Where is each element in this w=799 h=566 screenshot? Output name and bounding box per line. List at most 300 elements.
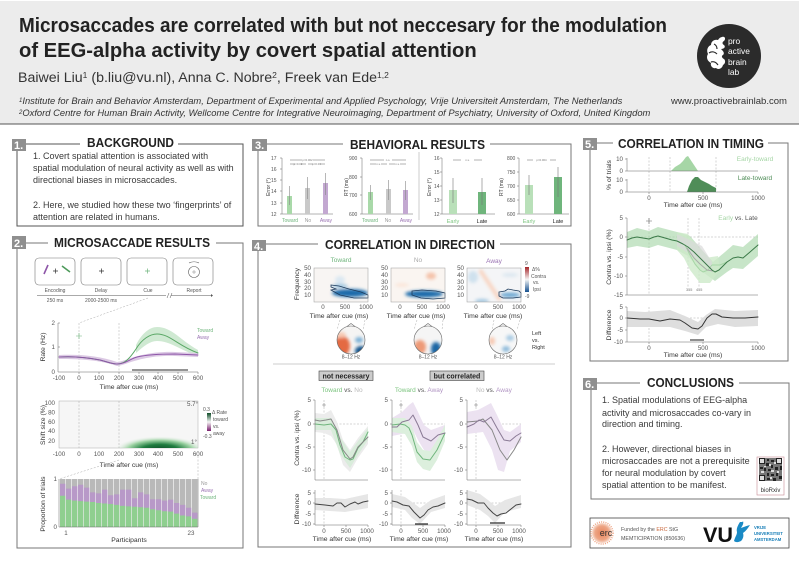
heatmap: no: 40 [381,272,389,279]
bar chart: RT by timing: Late [553,219,563,225]
bar chart: error by direction [266,156,333,224]
difference chart: no vs away: 5 [460,490,464,497]
panel: behavioral results [252,137,571,226]
task diagram: Cue [143,288,153,294]
line chart: early vs late: -5 [617,254,624,261]
text block [33,151,234,222]
bar chart: RT by timing: p=0.004 [536,158,547,162]
difference chart: timing: 0 [647,345,651,352]
bar chart: error by direction: p=0.03 [312,162,321,166]
heatmap: away: 10 [457,292,465,299]
line chart: early vs late: -10 [614,273,624,280]
left vs right label: Left [532,331,542,337]
icon: VU logo [703,521,783,547]
line chart: saccade rate: 400 [153,375,164,382]
heatmap: away: 30 [457,279,465,286]
difference chart: toward vs no: Difference [294,493,301,524]
icon: proactive brain lab logo [697,24,761,88]
heatmap: toward: Frequency [294,267,301,300]
chart: toward vs no: 0 [308,421,312,428]
line chart: saccade rate: 0 [77,375,81,382]
bar chart: error by direction: Away [320,218,333,224]
chart: toward vs away: -10 [379,467,389,474]
line chart: early vs late: 355 [686,288,692,292]
label: but correlated [430,371,484,380]
text block: 1. Spatial modulations of EEG-alpha [602,395,747,405]
bar chart: RT by direction: n.s. [395,162,400,166]
heatmap: toward: 20 [304,285,312,292]
heatmap: no: 1000 [436,304,450,311]
stacked bar chart: proportion of trials: No [201,481,208,487]
bar chart: RT by direction [344,156,413,224]
authors: 2 [272,70,277,80]
panel number [583,138,597,151]
difference chart: toward vs no: 0 [308,500,312,507]
heatmap: toward: 0 [321,304,325,311]
difference chart: no vs away: 1000 [512,528,526,535]
difference chart: no vs away [454,490,526,543]
colorbar legend: -9 [525,294,530,300]
icon: VU logo: VRIJE [754,525,766,530]
bar chart: error by timing: Early [447,219,460,225]
panel number [252,139,267,152]
panel number: 2. [14,238,23,250]
bar chart: error by direction: 14 [271,189,277,195]
line chart: early vs late: Contra vs. ipsi (%) [606,229,613,285]
difference chart: toward vs away: 0 [385,500,389,507]
affiliations: Institute for Brain and Behavior Amsterdam, Department of Experimental and Applied Psychology, Vrije Universiteit Amsterdam, The Netherlands [22,95,623,106]
colorbar legend: away [213,431,225,437]
heatmap: shift size: 5.7° [187,401,199,408]
icon: QR code: bioRxiv [761,488,780,494]
line chart: saccade rate: 300 [134,375,145,382]
bar chart: error by timing: 16 [434,156,440,162]
task diagram: Encoding [45,288,66,294]
difference chart: toward vs away: 1000 [437,528,451,535]
colorbar legend: Δ% [532,267,540,273]
topography: no: 8–12 Hz [419,354,438,360]
difference chart: toward vs no: 0 [322,528,326,535]
heatmap: toward [294,257,373,320]
affiliations [18,95,651,118]
difference chart: toward vs away [379,490,451,543]
text block: spatial modulation of neural activity as well as with [33,163,234,173]
left vs right label [532,331,545,351]
icon: ERC logo [591,522,613,544]
bar chart: error by direction: 17 [271,156,277,162]
histogram: timing distribution: 10 [616,156,624,163]
bar chart: RT by direction: 600 [349,212,358,218]
line chart: early vs late: -15 [614,292,624,299]
bar chart: RT by timing: 750 [507,170,516,176]
panel: background [12,135,243,226]
line chart: saccade rate [40,298,213,391]
panel number [583,378,597,391]
colorbar legend: toward [213,417,228,423]
heatmap: away: 1000 [512,304,526,311]
difference chart: toward vs no: 5 [308,490,312,497]
bar chart: error by timing [427,156,495,225]
line chart: saccade rate: 1 [52,344,56,351]
difference chart: toward vs no: -10 [302,521,312,528]
bar chart: error by direction: p=0.02 [294,162,303,166]
header band [0,1,799,124]
difference chart: timing: 0 [620,315,624,322]
text block: 2. However, directional biases in [602,444,731,454]
histogram: timing distribution: Late-toward [738,175,773,182]
heatmap: shift size: -100 [53,451,66,458]
line chart: saccade rate: 0 [52,369,56,376]
heatmap: away: 40 [457,272,465,279]
task diagram: Delay [95,288,108,294]
icon: ERC logo: erc [600,528,613,538]
authors: 1 [83,70,88,80]
icon: proactive brain lab logo: brain [728,57,747,67]
heatmap: away [457,258,526,320]
heatmap: toward: 50 [304,265,312,272]
difference chart: timing [606,304,765,359]
difference chart: toward vs away: 5 [385,490,389,497]
panel: microsaccade results [12,235,243,548]
heatmap: away: Time after cue (ms) [464,313,522,320]
histogram: timing distribution: Time after cue (ms) [664,202,722,209]
task diagram: Report [186,288,202,294]
bar chart: error by timing: n.s. [465,158,470,162]
line chart: saccade rate: Away [197,335,210,341]
text block: 2. Here, we studied how these two ‘fingerprints’ of [33,200,232,210]
panel: conclusions [583,375,789,499]
line chart: saccade rate: 200 [114,375,125,382]
bar chart: error by direction: 12 [271,212,277,218]
difference chart: timing: -10 [614,339,624,346]
chart: no vs away: -5 [457,444,464,451]
difference chart: timing: -5 [617,327,624,334]
difference chart: no vs away: -5 [457,511,464,518]
topography: away [489,324,517,360]
left vs right label: vs. [532,338,540,344]
heatmap: shift size: 300 [134,451,145,458]
difference chart: toward vs no: Time after cue (ms) [313,536,371,543]
panel number: 1. [14,140,23,152]
topography: away: 8–12 Hz [494,354,513,360]
title: Microsaccades are correlated with but not neccesary for the modulation [19,15,667,37]
bar chart: error by direction: 13 [271,201,277,207]
affiliations: 2 [18,110,23,116]
line chart: saccade rate: 600 [193,375,204,382]
topography: toward: 8–12 Hz [342,354,361,360]
text block: 1. Covert spatial attention is associated with [33,151,208,161]
stacked bar chart: proportion of trials: Toward [200,495,216,501]
heatmap: away: 50 [457,265,465,272]
topography: toward [336,323,366,358]
difference chart: timing: 1000 [751,345,765,352]
line chart: early vs late: 0 [620,234,624,241]
chart: toward vs away: 0 [385,421,389,428]
website: www.proactivebrainlab.com [670,96,787,106]
panel number: 3. [255,140,264,152]
text block: spatial attention to be manifest. [602,480,727,490]
heatmap: toward: 10 [304,292,312,299]
bar chart: error by direction: Error (°) [266,178,272,196]
heatmap: shift size: 500 [173,451,184,458]
heatmap: no [381,257,450,320]
histogram: timing distribution: 1000 [751,195,765,202]
stacked bar chart: proportion of trials: 0 [54,524,58,531]
chart: no vs away: -10 [454,467,464,474]
heatmap: no: 500 [417,304,428,311]
left vs right label: Right [532,345,545,351]
text block: microsaccades are not a prerequisite [602,456,750,466]
chart: toward vs no: Contra vs. ipsi (%) [294,410,301,466]
difference chart: toward vs away: Time after cue (ms) [390,536,448,543]
stacked bar chart: proportion of trials: 23 [188,530,195,537]
heatmap: no: No [414,257,423,264]
line chart: saccade rate: -100 [53,375,66,382]
heading: MICROSACCADE RESULTS [54,235,210,250]
heatmap: shift size: 400 [153,451,164,458]
text block: attention are related in humans. [33,212,160,222]
bar chart: RT by timing: 650 [507,198,516,204]
heatmap: shift size [40,400,228,469]
colorbar legend: vs. [533,280,539,286]
difference chart: toward vs away: -5 [382,511,389,518]
line chart: saccade rate: Rate (Hz) [40,332,47,362]
panel: correlation in direction [252,237,571,547]
histogram: timing distribution: 0 [620,168,624,175]
title: of EEG-alpha activity by covert spatial attention [19,40,477,62]
difference chart: toward vs away: 0 [399,528,403,535]
stacked bar chart: proportion of trials: Away [201,488,214,494]
heading: CORRELATION IN DIRECTION [325,237,495,252]
difference chart: no vs away: 0 [460,500,464,507]
heading: CORRELATION IN TIMING [618,136,764,151]
stacked bar chart: proportion of trials: 1 [64,530,68,537]
funding text [621,527,685,542]
heatmap: away: 0 [474,304,478,311]
task diagram: 250 ms [47,298,64,304]
heatmap: toward: 500 [340,304,351,311]
funding logos [590,518,789,548]
histogram: timing distribution: % of trials [606,159,613,190]
heatmap: away: 500 [493,304,504,311]
heatmap: away: 20 [457,285,465,292]
bar chart: error by direction: p=0.002 [302,158,313,162]
histogram: timing distribution: 0 [620,189,624,196]
title [19,15,667,62]
difference chart: toward vs no [294,490,374,543]
difference chart: timing: 5 [620,304,624,311]
bar chart: error by direction: No [305,218,311,224]
difference chart: toward vs no: 500 [341,528,352,535]
heatmap: no: Time after cue (ms) [387,313,445,320]
heatmap: toward: 30 [304,279,312,286]
colorbar legend [203,407,228,440]
funding text: MEMTICIPATION (850636) [621,536,685,542]
stacked bar chart: proportion of trials: 1 [54,476,58,483]
bar chart: RT by direction: Toward [362,218,378,224]
line chart: early vs late: 5 [620,215,624,222]
heatmap: toward: Time after cue (ms) [310,313,368,320]
text block: directional biases in microsaccades. [33,175,177,185]
topography: no [414,324,442,360]
difference chart: toward vs no: 1000 [360,528,374,535]
heatmap: shift size: 1° [191,439,197,446]
difference chart: timing: 500 [698,345,709,352]
difference chart: toward vs away: 500 [418,528,429,535]
bar chart: RT by direction: No [385,218,391,224]
heatmap: shift size: 100 [94,451,105,458]
heading: CONCLUSIONS [647,375,734,390]
chart: toward vs no [294,387,368,480]
label: not necessary [319,371,373,380]
histogram: timing distribution [606,156,774,209]
bar chart: RT by direction: 900 [349,156,358,162]
heatmap: no: 10 [381,292,389,299]
bar chart: RT by direction: Away [400,218,413,224]
line chart: saccade rate: 500 [173,375,184,382]
heatmap: no: 0 [398,304,402,311]
histogram: timing distribution: 0 [647,195,651,202]
task diagram: 2000-2500 ms [85,298,117,304]
stacked bar chart: proportion of trials: Participants [111,537,147,544]
bar chart: error by timing: 15 [434,170,440,176]
chart: toward vs no: 5 [308,397,312,404]
colorbar legend: Ipsi [533,287,541,293]
line chart: early vs late: 455 [696,288,702,292]
colorbar legend: Δ Rate [212,410,227,416]
authors: , Freek van Ede [277,70,377,86]
line chart: saccade rate: Toward [197,328,213,334]
panel number [252,240,266,253]
icon: proactive brain lab logo: pro [728,36,740,46]
chart: no vs away: 5 [460,397,464,404]
bar chart: RT by timing: RT (ms) [499,178,505,196]
bar chart: RT by direction: 700 [349,193,358,199]
chart: toward vs away: Toward vs. Away [395,387,444,394]
bar chart: RT by timing [499,156,569,225]
bar chart: error by timing: Error (°) [427,178,433,196]
line chart: early vs late [606,215,758,299]
heatmap: shift size: 20 [48,438,56,445]
difference chart: no vs away: -10 [454,521,464,528]
text block [602,395,751,490]
heatmap: shift size: 40 [48,428,56,435]
bar chart: error by timing: Late [477,219,487,225]
chart: no vs away: 0 [460,421,464,428]
affiliations: 1 [19,98,22,104]
bar chart: RT by timing: 600 [507,212,516,218]
chart: toward vs away: 5 [385,397,389,404]
heatmap: shift size: 60 [48,419,56,426]
chart: toward vs no: -5 [305,444,312,451]
panel number: 5. [585,139,594,151]
bar chart: error by direction: 15 [271,178,277,184]
difference chart: timing: Time after cue (ms) [664,352,722,359]
bar chart: error by direction: 16 [271,167,277,173]
icon: VU logo: VU [703,524,733,547]
bar chart: RT by timing: 800 [507,156,516,162]
histogram: timing distribution: 500 [698,195,709,202]
heatmap: toward: 1000 [359,304,373,311]
line chart: early vs late: Early vs. Late [718,215,758,222]
heatmap: shift size: 100 [45,400,56,407]
histogram: timing distribution: Early-toward [737,156,774,163]
stacked bar chart: proportion of trials [40,456,216,544]
line chart: saccade rate: 2 [52,320,56,327]
heading: BEHAVIORAL RESULTS [350,137,485,152]
funding text: Funded by the ERC StG [621,527,678,533]
heading: BACKGROUND [87,135,174,150]
heatmap: no: 50 [381,265,389,272]
colorbar legend: 9 [525,261,528,267]
bar chart: error by timing: 14 [434,184,440,190]
chart: toward vs away [379,387,445,480]
panel number [12,139,26,152]
icon: proactive brain lab logo: lab [728,67,740,77]
histogram: timing distribution: 10 [616,177,624,184]
difference chart: no vs away: 0 [474,528,478,535]
colorbar legend: 0.3 [203,407,210,413]
heatmap: shift size: 0 [77,451,81,458]
chart: toward vs no: -10 [302,467,312,474]
bar chart: error by timing: 13 [434,198,440,204]
text block: direction and timing. [602,419,683,429]
colorbar legend: -0.3 [203,434,212,440]
difference chart: toward vs away: -10 [379,521,389,528]
label: not necessary: not necessary [322,374,370,380]
panel number [12,236,26,250]
heatmap: shift size: Time after cue (ms) [100,462,158,469]
bar chart: RT by direction: n.s. [386,158,390,162]
panel number: 4. [254,241,263,253]
line chart: saccade rate: 100 [94,375,105,382]
chart: no vs away: No vs. Away [476,387,513,394]
heatmap: no: 30 [381,279,389,286]
difference chart: toward vs no: -5 [305,511,312,518]
bar chart: RT by timing: 700 [507,184,516,190]
colorbar legend: Contra [531,274,546,280]
task diagram [35,258,213,304]
authors: Baiwei Liu [18,70,83,86]
heatmap: away: Away [486,258,503,265]
bar chart: error by timing: 12 [434,212,440,218]
text block: activity and microsaccades co-vary in [602,408,751,418]
affiliations: Oxford Centre for Human Brain Activity, Wellcome Centre for Integrative Neuroimaging, Department of Psychiatry, University of Oxford, United Kingdom [22,107,651,118]
heatmap: shift size: Shift size (%) [40,405,47,445]
heatmap: toward: 40 [304,272,312,279]
difference chart: no vs away: 500 [493,528,504,535]
panel number: 6. [585,379,594,391]
stacked bar chart: proportion of trials: Proportion of trials [40,476,47,532]
bar chart: RT by direction: RT (ms) [344,178,350,196]
icon: VU logo: UNIVERSITEIT [754,531,783,536]
bar chart: error by direction: Toward [282,218,298,224]
colorbar legend [525,261,546,300]
authors: 1,2 [377,70,389,80]
heatmap: toward: Toward [331,257,352,264]
bar chart: RT by direction: n.s. [376,162,381,166]
bar chart: RT by timing: Early [523,219,536,225]
line chart: saccade rate: Time after cue (ms) [100,384,158,391]
icon: proactive brain lab logo: active [728,46,750,56]
heatmap: shift size: 80 [48,410,56,416]
text block: for neural modulation by covert [602,468,726,478]
bar chart: RT by direction: 800 [349,175,358,181]
panel: correlation in timing [583,136,788,361]
difference chart: no vs away: Time after cue (ms) [465,536,523,543]
chart: toward vs no: Toward vs. No [321,387,363,394]
label: but correlated: but correlated [434,374,480,380]
